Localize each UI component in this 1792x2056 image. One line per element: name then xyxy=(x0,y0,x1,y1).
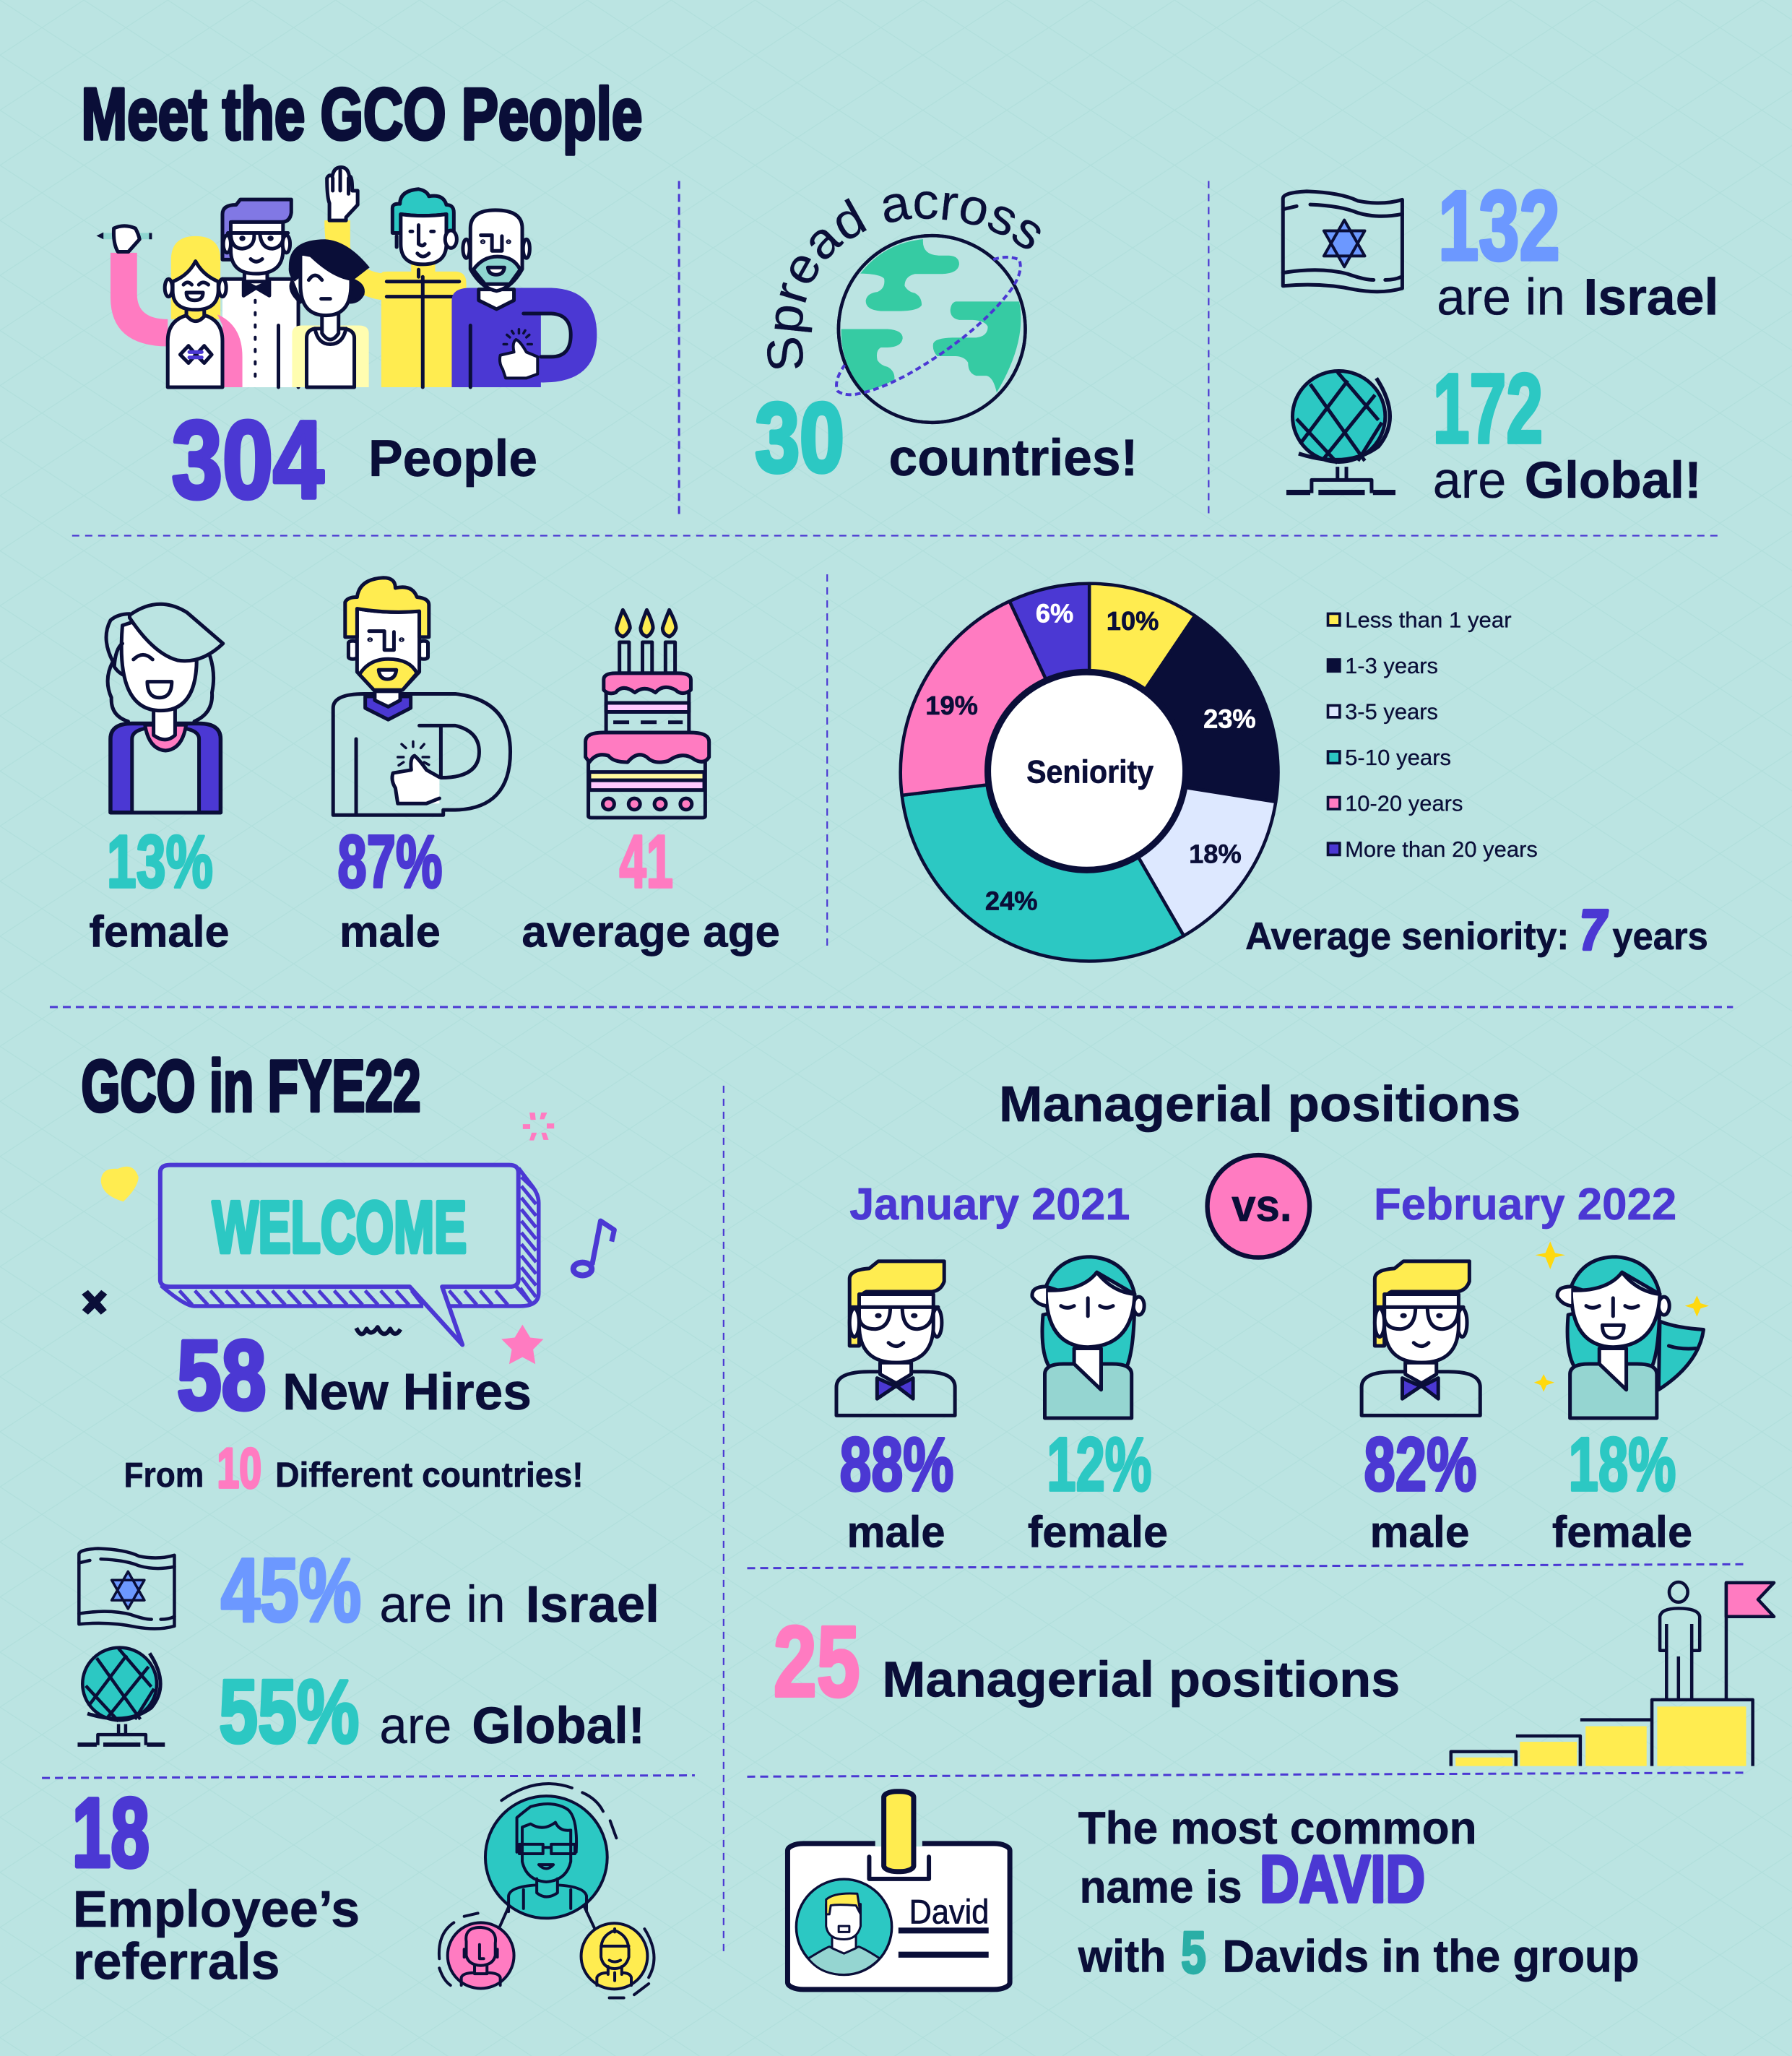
legend xyxy=(1328,608,1538,862)
donut labels: 24% xyxy=(985,886,1038,916)
illustration: five GCO people xyxy=(96,167,597,387)
stat: 25 managerial positions: Managerial positions xyxy=(882,1651,1400,1708)
stats: February 2022 split: 18% xyxy=(1569,1422,1676,1507)
label: countries!: countries! xyxy=(889,429,1138,487)
stats: January 2021 split: 12% xyxy=(1047,1422,1151,1507)
slice: less than 1 year 10% xyxy=(1089,584,1195,772)
text: most common name xyxy=(1078,1803,1640,1986)
stats: January 2021 split: male xyxy=(847,1508,945,1557)
label: are in Israel: Israel xyxy=(1583,269,1718,327)
slice: more than 20 years 6% xyxy=(1010,584,1089,772)
text: most common name: Davids in the group xyxy=(1222,1932,1640,1982)
versus badge: vs. xyxy=(1232,1181,1292,1231)
versus badge xyxy=(1208,1155,1310,1258)
donut labels: 10% xyxy=(1107,606,1159,636)
stat: 55% are Global xyxy=(219,1662,645,1762)
label: People: People xyxy=(368,430,537,488)
average seniority: 7 years: years xyxy=(1612,915,1708,958)
text: most common name: with xyxy=(1078,1932,1166,1982)
donut labels xyxy=(925,598,1256,916)
icon: David name badge xyxy=(787,1792,1010,1990)
stat: 172: 172 xyxy=(1433,354,1543,465)
stats: February 2022 split xyxy=(1364,1422,1692,1557)
stats: January 2021 split: 88% xyxy=(839,1422,953,1507)
person with glasses and purple hair xyxy=(222,199,298,387)
stat: 45% are in Israel: are in xyxy=(379,1576,506,1633)
bald bearded man with purple mug sweater xyxy=(451,210,597,387)
label: average age: average age xyxy=(521,907,780,956)
icon: Israeli flag xyxy=(1283,191,1402,292)
stat: 25 managerial positions xyxy=(774,1606,1400,1718)
icon: female employee xyxy=(106,604,223,813)
label: male: male xyxy=(339,907,441,956)
heading: Managerial positions: Managerial positions xyxy=(999,1076,1520,1132)
icon: male manager February xyxy=(1362,1261,1480,1415)
icon: pink burst xyxy=(523,1113,554,1141)
stat: 58 New Hires: 58 xyxy=(177,1320,266,1430)
label: are Global!: Global! xyxy=(1525,452,1702,509)
icon: pink star xyxy=(501,1325,543,1364)
stats: February 2022 split: male xyxy=(1370,1508,1470,1557)
label: are Global!: are xyxy=(1433,452,1506,509)
legend: 3-5 years xyxy=(1345,699,1438,725)
legend: 1-3 years xyxy=(1345,653,1438,678)
stat: 13%: 13% xyxy=(107,819,213,903)
stat: 304: 304 xyxy=(172,399,324,522)
icon: yellow heart xyxy=(101,1167,139,1201)
legend: 10-20 years xyxy=(1345,791,1463,816)
average seniority: 7 years xyxy=(1245,898,1708,962)
date: January 2021: January 2021 xyxy=(849,1180,1130,1230)
stats: February 2022 split: 82% xyxy=(1364,1422,1477,1507)
stat: 45% are in Israel: Israel xyxy=(526,1576,659,1633)
slice: 1-3 years 23% xyxy=(1089,615,1278,802)
label: are in Israel: are in xyxy=(1437,269,1565,327)
stat: 87%: 87% xyxy=(337,819,443,903)
stat: from 10 different countries: From xyxy=(124,1456,204,1495)
icon: Israeli flag small xyxy=(79,1549,174,1629)
stats: January 2021 split xyxy=(839,1422,1168,1557)
label: Employee's referrals: Employee’s xyxy=(73,1880,360,1938)
donut centre xyxy=(988,672,1186,870)
slice: 3-5 years 18% xyxy=(1089,772,1276,936)
label: are in Israel xyxy=(1437,269,1718,327)
legend: 5-10 years xyxy=(1345,745,1451,770)
badge name: David: David xyxy=(909,1893,989,1931)
average seniority: 7 years: Average seniority: xyxy=(1245,915,1569,958)
stat: from 10 different countries xyxy=(124,1436,584,1500)
legend: More than 20 years xyxy=(1345,837,1538,862)
icon: squiggle xyxy=(356,1327,400,1334)
donut labels: 23% xyxy=(1203,704,1256,733)
stat: 58 New Hires: New Hires xyxy=(282,1363,532,1421)
donut labels: 18% xyxy=(1189,839,1242,868)
icon: male manager January xyxy=(836,1261,955,1415)
woman with black hair and cream cardigan xyxy=(289,239,370,387)
stat: from 10 different countries: Different countries! xyxy=(275,1456,584,1495)
stat: 45% are in Israel: 45% xyxy=(221,1540,361,1641)
stat: 25 managerial positions: 25 xyxy=(774,1606,860,1718)
stat: 41: 41 xyxy=(620,819,673,903)
stat: 55% are Global: are xyxy=(379,1697,451,1755)
icon: person on yellow stairs with flag xyxy=(1451,1582,1774,1766)
stats: February 2022 split: female xyxy=(1552,1508,1692,1557)
stat: 58 New Hires xyxy=(177,1320,532,1430)
slice: 5-10 years 24% xyxy=(902,772,1184,961)
donut title: Seniority: Seniority xyxy=(1026,755,1153,790)
label: female: female xyxy=(89,907,230,956)
legend: Less than 1 year xyxy=(1345,608,1512,633)
stat: from 10 different countries: 10 xyxy=(217,1436,261,1500)
date: February 2022: February 2022 xyxy=(1374,1180,1676,1230)
icon: navy cross xyxy=(82,1290,107,1315)
icon: referral network xyxy=(439,1784,654,1997)
icon: male employee with mug sweater xyxy=(333,578,511,815)
stat: 55% are Global: 55% xyxy=(219,1662,359,1762)
icon: desk globe small xyxy=(77,1648,165,1747)
stat: 18: 18 xyxy=(72,1778,150,1888)
raised arm and jacket: yellow person xyxy=(324,167,467,387)
welcome text: WELCOME xyxy=(212,1185,467,1268)
stat: 132: 132 xyxy=(1438,170,1560,281)
icon: female manager January xyxy=(1032,1257,1144,1418)
text: most common name: The most common xyxy=(1078,1803,1477,1854)
text: most common name: 5 xyxy=(1181,1920,1206,1986)
icon: desk globe xyxy=(1286,371,1395,495)
slice: 10-20 years 19% xyxy=(901,601,1089,795)
title: Meet the GCO People: Meet the GCO People xyxy=(82,74,642,155)
heading: GCO in FYE22: GCO in FYE22 xyxy=(82,1046,421,1127)
stat: 45% are in Israel xyxy=(221,1540,659,1641)
icon: music note xyxy=(592,1221,614,1265)
icon: female manager February with sparkles xyxy=(1534,1241,1709,1418)
icon: earth globe with orbit xyxy=(836,236,1026,423)
label: are Global! xyxy=(1433,452,1702,509)
icon: birthday cake xyxy=(586,610,709,818)
welcome speech bubble with decorations xyxy=(82,1113,614,1364)
stat: 55% are Global: Global! xyxy=(472,1697,645,1755)
average seniority: 7 years: 7 xyxy=(1580,898,1608,962)
curved text: Spread across: Spread across xyxy=(767,191,1041,368)
label: Employee's referrals: referrals xyxy=(73,1933,280,1991)
text: most common name: DAVID xyxy=(1260,1843,1425,1917)
blonde woman with pink sleeve xyxy=(96,226,243,387)
donut labels: 6% xyxy=(1036,598,1073,628)
stat: 30: 30 xyxy=(755,383,844,493)
label: Employee's referrals xyxy=(73,1880,360,1991)
donut chart: seniority xyxy=(901,584,1278,961)
stats: January 2021 split: female xyxy=(1028,1508,1168,1557)
donut labels: 19% xyxy=(925,691,978,720)
text: most common name: name is xyxy=(1080,1862,1242,1913)
